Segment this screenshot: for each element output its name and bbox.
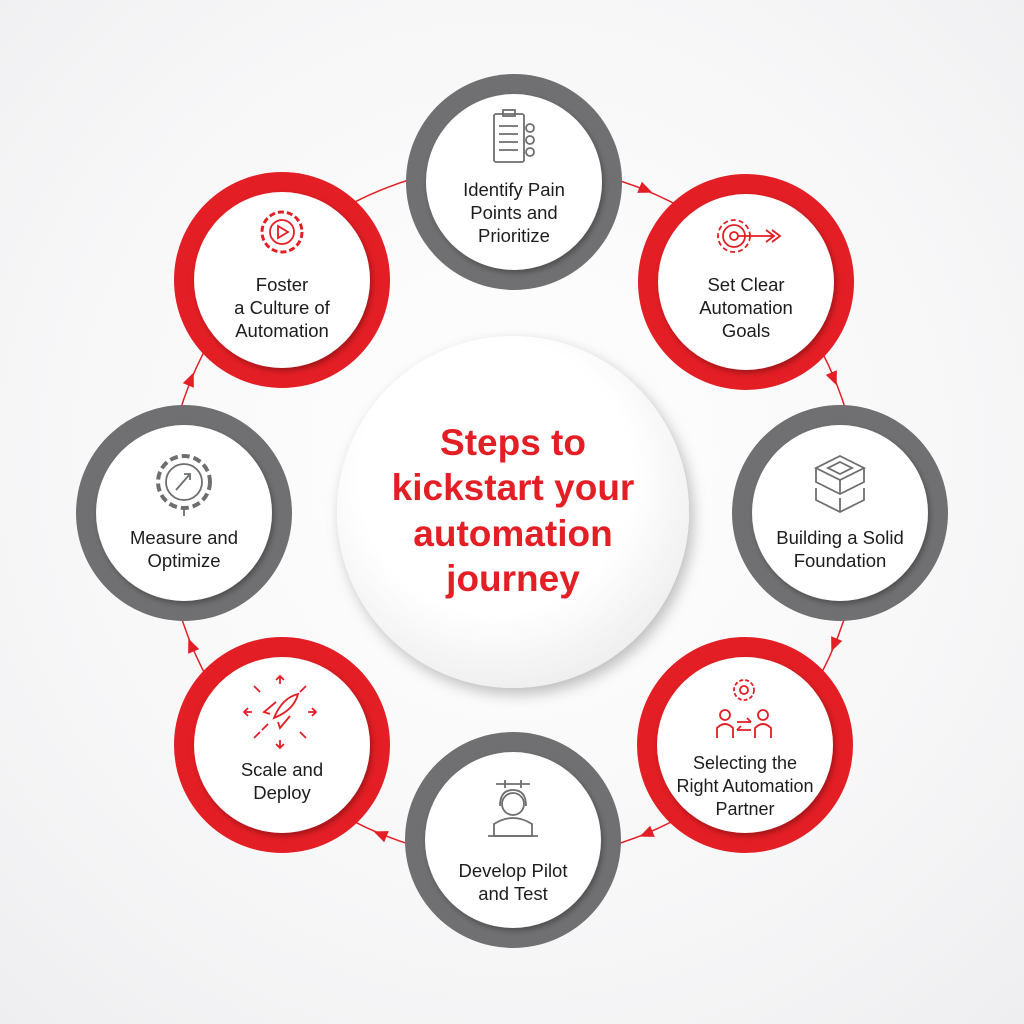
center circle: title: Steps to <box>440 422 586 463</box>
step 2: Set Clear Automation Goals: Automation <box>699 297 793 318</box>
step 5: Develop Pilot and Test: and Test <box>478 883 548 904</box>
step 6: Scale and Deploy <box>174 637 390 853</box>
icon: gear with play <box>262 212 302 252</box>
step 8: Foster a Culture of Automation: Automation <box>235 320 329 341</box>
step 3: Building a Solid Foundation: Building a Solid <box>776 527 904 548</box>
step 4: Selecting the Right Automation Partner <box>637 637 853 853</box>
step 4: Selecting the Right Automation Partner: Partner <box>715 799 775 819</box>
center circle: title: journey <box>445 558 580 599</box>
icon: gear gauge <box>158 456 210 516</box>
step 8: Foster a Culture of Automation: Foster <box>256 274 308 295</box>
step 5: Develop Pilot and Test: Develop Pilot <box>458 860 568 881</box>
step 3: Building a Solid Foundation <box>732 405 948 621</box>
step 7: Measure and Optimize: Measure and <box>130 527 238 548</box>
icon: people exchange gear <box>717 680 771 738</box>
connector ring with arrows <box>165 164 861 860</box>
center circle: title: kickstart your <box>392 467 634 508</box>
icon: pilot with headset <box>488 780 538 836</box>
step 3: Building a Solid Foundation: Foundation <box>794 550 886 571</box>
center circle: title: automation <box>413 513 613 554</box>
step 4: Selecting the Right Automation Partner: Right Automation <box>676 776 814 796</box>
step 8: Foster a Culture of Automation <box>174 172 390 388</box>
step 2: Set Clear Automation Goals: Goals <box>722 320 770 341</box>
step 5: Develop Pilot and Test <box>405 732 621 948</box>
center circle: title <box>337 336 689 688</box>
step 1: Identify Pain Points and Prioritize: Points and <box>470 202 558 223</box>
step 4: Selecting the Right Automation Partner: Selecting the <box>693 753 797 773</box>
step 8: Foster a Culture of Automation: a Culture of <box>234 297 331 318</box>
step 6: Scale and Deploy: Deploy <box>253 782 312 803</box>
icon: clipboard checklist <box>494 110 534 162</box>
step 7: Measure and Optimize: Optimize <box>148 550 220 571</box>
icon: rocket with arrows <box>244 676 316 748</box>
step 1: Identify Pain Points and Prioritize <box>406 74 622 290</box>
step 2: Set Clear Automation Goals <box>638 174 854 390</box>
icon: gear target <box>718 220 780 252</box>
step 1: Identify Pain Points and Prioritize: Prioritize <box>478 225 550 246</box>
step 7: Measure and Optimize <box>76 405 292 621</box>
step 2: Set Clear Automation Goals: Set Clear <box>707 274 785 295</box>
icon: stacked blocks <box>816 456 864 512</box>
step 6: Scale and Deploy: Scale and <box>241 759 323 780</box>
step 1: Identify Pain Points and Prioritize: Identify Pain <box>463 179 565 200</box>
